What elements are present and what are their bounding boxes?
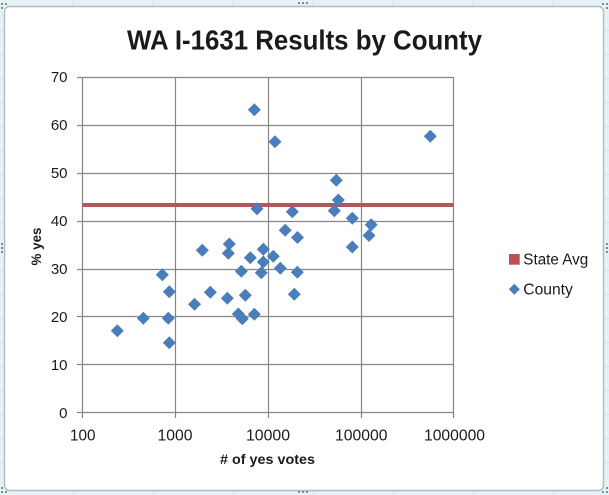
x axis labels — [70, 428, 485, 444]
x axis labels: 1000 — [158, 428, 193, 444]
y axis title: % yes — [28, 227, 44, 266]
x axis labels: 10000 — [246, 428, 290, 444]
plot gridlines and axes — [77, 77, 454, 418]
y axis labels: 10 — [51, 357, 68, 374]
y axis labels: 30 — [51, 261, 68, 278]
title: WA I-1631 Results by County — [127, 24, 483, 56]
legend label: county: County — [523, 282, 573, 298]
x axis title: # of yes votes — [220, 451, 315, 467]
legend — [509, 252, 588, 298]
y axis labels: 40 — [51, 213, 68, 230]
state average line — [82, 203, 454, 207]
county data points — [111, 103, 437, 349]
y axis labels: 70 — [51, 69, 68, 86]
legend marker: county — [509, 284, 520, 295]
legend label: state average: State Avg — [523, 252, 588, 268]
y axis labels — [51, 69, 68, 422]
legend swatch: state average — [509, 254, 520, 265]
y axis labels: 50 — [51, 165, 68, 182]
x axis labels: 1000000 — [424, 428, 485, 444]
y axis labels: 0 — [59, 405, 68, 422]
x axis labels: 100 — [70, 428, 96, 444]
y axis labels: 60 — [51, 117, 68, 134]
x axis labels: 100000 — [335, 428, 388, 444]
y axis labels: 20 — [51, 309, 68, 326]
